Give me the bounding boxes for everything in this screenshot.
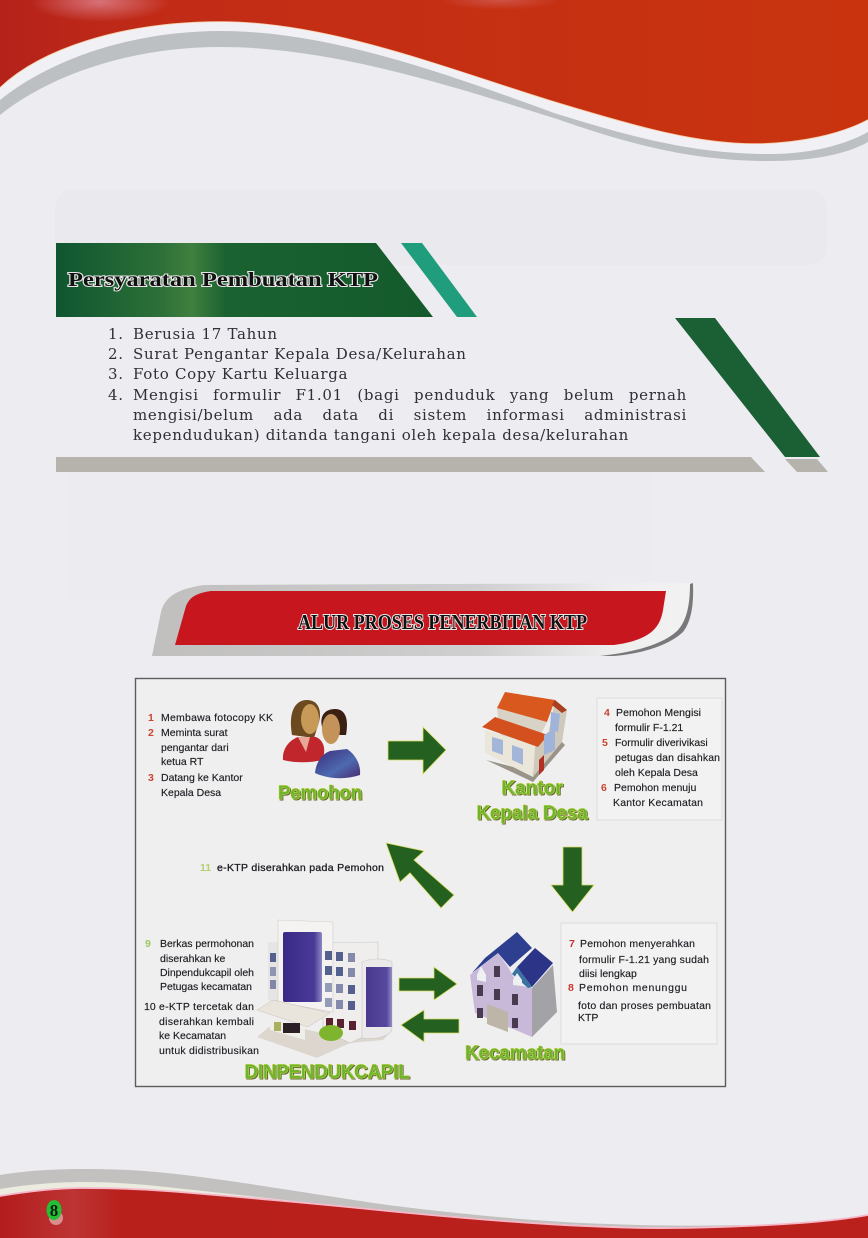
steps 1-3 text: ketua RT (161, 756, 204, 768)
label: Kantor Kepala Desa: Kepala Desa (476, 803, 588, 824)
item 2 text: Surat Pengantar Kepala Desa/Kelurahan (133, 345, 467, 363)
heading: alur proses: ALUR PROSES PENERBITAN KTP (298, 610, 587, 634)
steps 1-3 text: Datang ke Kantor (161, 772, 243, 784)
steps 9-10 text: untuk didistribusikan (159, 1045, 259, 1057)
arrow: back to applicant (386, 843, 454, 908)
bottom red wave footer (0, 1169, 868, 1238)
steps 1-3 text: Membawa fotocopy KK (161, 712, 273, 724)
steps 4-6 text: Formulir diverivikasi (615, 737, 708, 749)
steps 7-8 text: foto dan proses pembuatan (578, 1000, 711, 1012)
steps 4-6 text: oleh Kepala Desa (615, 767, 698, 779)
steps 7-8 text: 7 (569, 938, 575, 950)
steps 9-10 text: diserahkan kembali (159, 1016, 254, 1028)
steps 4-6 text: Pemohon menuju (614, 782, 696, 794)
grey divider bar (56, 457, 765, 472)
icon: Dinpendukcapil building (257, 920, 392, 1058)
steps 9-10 text: 9 (145, 938, 151, 950)
steps 9-10 text: 10 (144, 1001, 156, 1013)
steps 7-8 text: KTP (578, 1012, 598, 1024)
text box: steps 7-8 background (561, 923, 717, 1044)
steps 7-8 text: diisi lengkap (579, 968, 637, 980)
requirements heading banner (56, 243, 433, 317)
steps 7-8 text: Pemohon menyerahkan (580, 938, 695, 950)
arrow: to Kecamatan (399, 967, 457, 1000)
step 11 text: 11 (200, 862, 211, 874)
steps 1-3 text: pengantar dari (161, 742, 229, 754)
steps 7-8 text: Pemohon menunggu (579, 982, 687, 994)
steps 1-3 text: Meminta surat (161, 727, 228, 739)
label: Kantor Kepala Desa (476, 778, 588, 824)
text box: steps 4-6 background (597, 698, 722, 820)
steps 4-6 text: Pemohon Mengisi (616, 707, 701, 719)
label: Kantor Kepala Desa: Kantor (501, 778, 563, 799)
label: Kecamatan: Kecamatan (465, 1043, 565, 1064)
icon: village office house (482, 692, 567, 782)
arrow: to village office (388, 727, 446, 774)
steps 1-3 text: 1 (148, 712, 154, 724)
steps 9-10 text: diserahkan ke (160, 953, 226, 965)
steps 4-6 text: 6 (601, 782, 607, 794)
process heading banner (152, 583, 695, 656)
item 2: 2. (108, 345, 124, 363)
item 1 text: Berusia 17 Tahun (133, 325, 278, 343)
heading: persyaratan: Persyaratan Pembuatan KTP (68, 269, 378, 291)
item 1: 1. (108, 325, 124, 343)
steps 4-6 text: formulir F-1.21 (615, 722, 683, 734)
requirements list (108, 325, 687, 444)
icon: sub-district building (470, 932, 557, 1037)
item 4 line 1: Mengisi formulir F1.01 (bagi penduduk yang belum pernah (133, 386, 687, 404)
icon: applicants (283, 700, 360, 778)
steps 1-3 text: 3 (148, 772, 154, 784)
steps 9-10 text: ke Kecamatan (159, 1030, 226, 1042)
step 11 text: e-KTP diserahkan pada Pemohon (217, 862, 384, 874)
arrow: to sub-district office (551, 847, 594, 912)
top red wave header (0, 0, 868, 161)
label: Dinpendukcapil: DINPENDUKCAPIL (244, 1062, 410, 1083)
item 4 line 3: kependudukan) ditanda tangani oleh kepala desa/kelurahan (133, 426, 629, 444)
item 3: 3. (108, 365, 124, 383)
steps 9-10 text: e-KTP tercetak dan (159, 1001, 254, 1013)
steps 9-10 text: Berkas permohonan (160, 938, 254, 950)
arrow: to Dinpendukcapil (401, 1010, 459, 1042)
page number badge (46, 1200, 63, 1225)
steps 9-10 text: Petugas kecamatan (160, 981, 252, 993)
flow diagram panel (136, 678, 726, 1086)
steps 1-3 text: Kepala Desa (161, 787, 221, 799)
steps 7-8 text: 8 (568, 982, 574, 994)
faint show-through from reverse page (55, 190, 827, 602)
page number badge: 8 (50, 1201, 58, 1220)
steps 9-10 text: Dinpendukcapil oleh (160, 967, 254, 979)
steps 4-6 text: petugas dan disahkan (615, 752, 720, 764)
steps 1-3 text (148, 712, 273, 799)
steps 4-6 text: Kantor Kecamatan (613, 797, 703, 809)
teal diagonal stripe (401, 243, 477, 317)
steps 4-6 text (601, 707, 720, 809)
grey bar end piece (785, 459, 828, 472)
item 4 line 2: mengisi/belum ada data di sistem informasi administrasi (133, 406, 687, 424)
item 3 text: Foto Copy Kartu Keluarga (133, 365, 348, 383)
steps 1-3 text: 2 (148, 727, 154, 739)
steps 7-8 text: formulir F-1.21 yang sudah (579, 954, 709, 966)
steps 7-8 text (568, 938, 711, 1024)
dark green diagonal stripe (675, 318, 820, 457)
steps 4-6 text: 5 (602, 737, 608, 749)
item 4: 4. (108, 386, 124, 404)
steps 4-6 text: 4 (604, 707, 610, 719)
steps 9-10 text (144, 938, 259, 1057)
label: Pemohon: Pemohon (278, 783, 362, 804)
